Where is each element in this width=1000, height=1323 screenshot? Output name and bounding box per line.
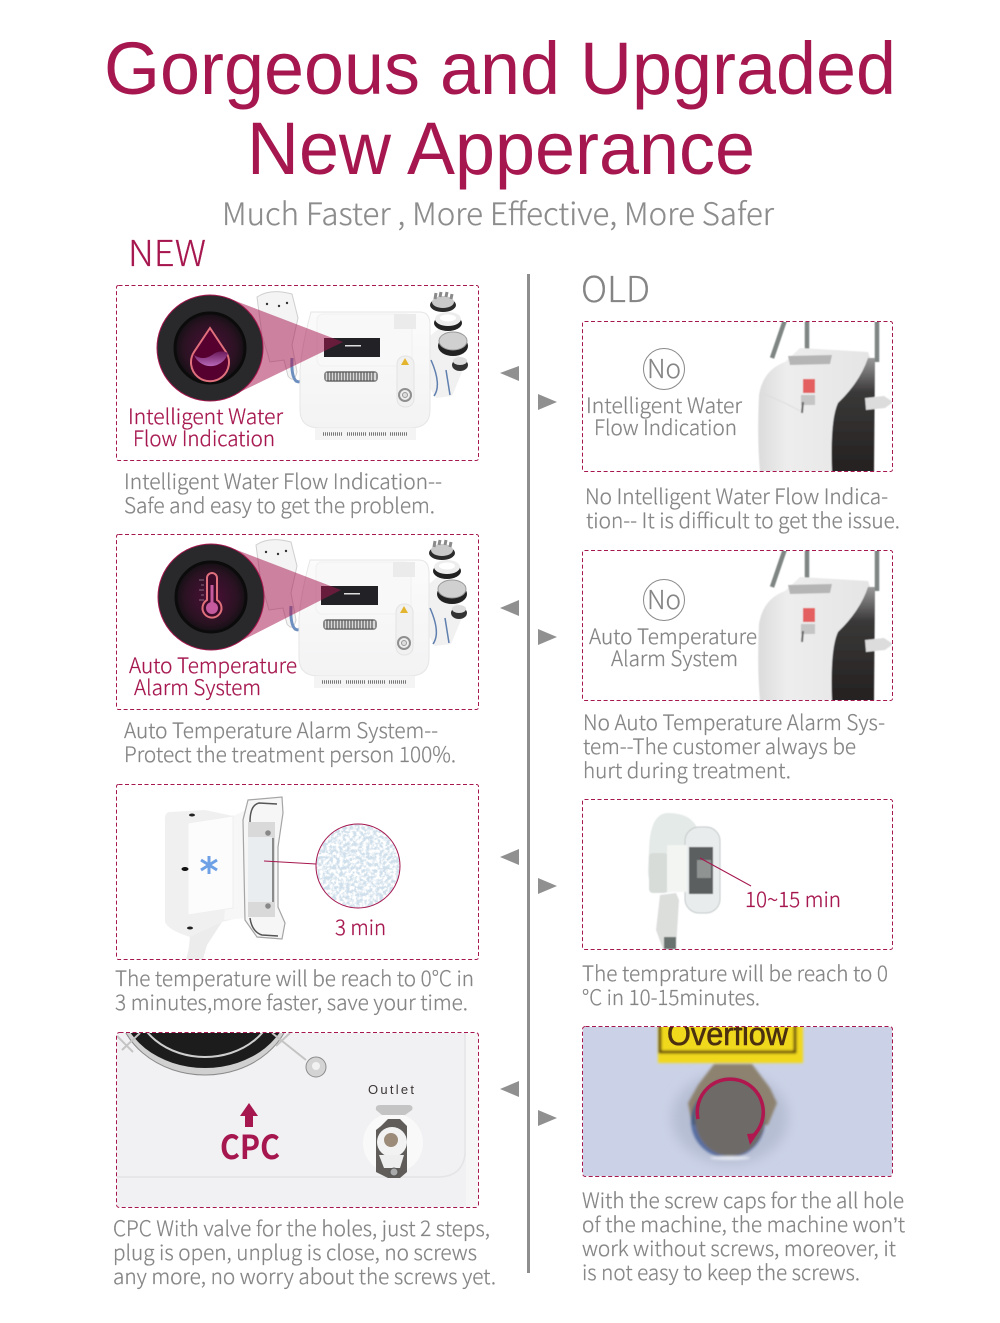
leader line <box>700 858 751 886</box>
comparison arrows <box>500 366 557 1126</box>
panel: new water flow <box>116 286 478 460</box>
text: water flow old description <box>585 481 900 535</box>
panel label <box>586 390 742 442</box>
title: New Apperance <box>247 107 755 190</box>
time label: 3 min <box>335 912 386 942</box>
text: temperature old description <box>583 707 885 785</box>
text: water flow old description: tion-- It is difficult to get the issue. <box>586 505 900 535</box>
panel: old water flow <box>582 320 893 472</box>
old machine photo <box>758 320 893 472</box>
panel: new CPC valve <box>116 1032 479 1208</box>
text: temperature old description: hurt during treatment. <box>583 755 791 785</box>
text: screw cap description: is not easy to keep the screws. <box>582 1257 860 1287</box>
panel: new temperature alarm <box>116 534 478 710</box>
rotation arrow <box>697 1079 763 1145</box>
panel label: Auto Temperature <box>589 621 757 651</box>
no badge: No <box>647 349 681 386</box>
text: cooling old description: °C in 10-15minutes. <box>582 982 760 1012</box>
text: water flow new description <box>124 466 442 520</box>
center divider <box>527 274 530 1273</box>
panel label <box>589 621 757 673</box>
text: cooling new description: 3 minutes,more faster, save your time. <box>115 987 468 1017</box>
text: CPC description: plug is open, unplug is close, no screws <box>113 1237 477 1267</box>
text: cooling new description: The temperature will be reach to 0°C in <box>115 963 474 993</box>
cryo handle illustration <box>165 797 285 959</box>
text: temperature new description <box>124 715 456 769</box>
leader line <box>264 861 316 864</box>
machine illustration <box>257 292 468 440</box>
frost detail circle <box>316 824 400 908</box>
text: CPC description: CPC With valve for the holes, just 2 steps, <box>113 1213 490 1243</box>
icon: up arrow <box>240 1103 258 1127</box>
screw photo <box>583 1018 892 1176</box>
time label: 10~15 min <box>745 884 841 914</box>
panel: new cooling 3 min <box>116 784 478 960</box>
text: water flow new description: Intelligent Water Flow Indication-- <box>124 466 442 496</box>
machine illustration <box>256 540 467 688</box>
icon: thermometer <box>158 544 264 650</box>
text: cooling old description <box>582 958 888 1012</box>
title: Gorgeous and Upgraded <box>104 27 896 110</box>
CPC label: CPC <box>220 1121 280 1169</box>
panel: old screw cap <box>582 1016 892 1176</box>
text: temperature new description: Auto Temperature Alarm System-- <box>124 715 438 745</box>
label text in photo: Overflow <box>667 1016 789 1052</box>
old machine photo <box>758 549 893 701</box>
text: temperature old description: No Auto Temperature Alarm Sys- <box>583 707 885 737</box>
panel label <box>128 401 283 453</box>
text: water flow new description: Safe and easy to get the problem. <box>124 490 435 520</box>
text: CPC description: any more, no worry about the screws yet. <box>113 1261 496 1291</box>
text: screw cap description: work without screws, moreover, it <box>582 1233 897 1263</box>
text: cooling new description <box>115 963 474 1017</box>
icon: magnifier cone <box>228 298 343 392</box>
outlet photo <box>117 1033 478 1207</box>
text: water flow old description: No Intelligent Water Flow Indica- <box>585 481 888 511</box>
icon: snowflake <box>201 856 217 874</box>
panel label: Flow Indication <box>133 423 275 453</box>
outlet label: Outlet <box>368 1082 414 1097</box>
text: CPC description <box>113 1213 496 1291</box>
text: screw cap description: of the machine, the machine won’t <box>582 1209 906 1239</box>
icon: water drop <box>157 295 263 401</box>
panel label: Alarm System <box>611 643 738 673</box>
text: screw cap description: With the screw caps for the all hole <box>582 1185 904 1215</box>
text: screw cap description <box>582 1185 906 1287</box>
title <box>104 27 896 190</box>
panel label: Flow Indication <box>594 412 737 442</box>
icon: magnifier cone <box>229 547 341 641</box>
text: cooling old description: The temprature will be reach to 0 <box>582 958 888 988</box>
heading: old: OLD <box>581 261 650 313</box>
panel label <box>129 650 297 702</box>
text: temperature old description: tem--The customer always be <box>583 731 856 761</box>
subtitle: Much Faster , More Effective, More Safer <box>222 189 775 234</box>
panel label: Intelligent Water <box>128 401 283 431</box>
heading: new: NEW <box>128 225 206 277</box>
panel label: Auto Temperature <box>129 650 297 680</box>
panel label: Intelligent Water <box>586 390 742 420</box>
text: temperature new description: Protect the treatment person 100%. <box>124 739 456 769</box>
panel label: Alarm System <box>134 672 261 702</box>
no badge: No <box>647 580 681 617</box>
panel: old cooling 10-15 min <box>582 800 892 950</box>
old handle photo <box>648 813 720 949</box>
panel: old temperature alarm <box>582 549 893 701</box>
